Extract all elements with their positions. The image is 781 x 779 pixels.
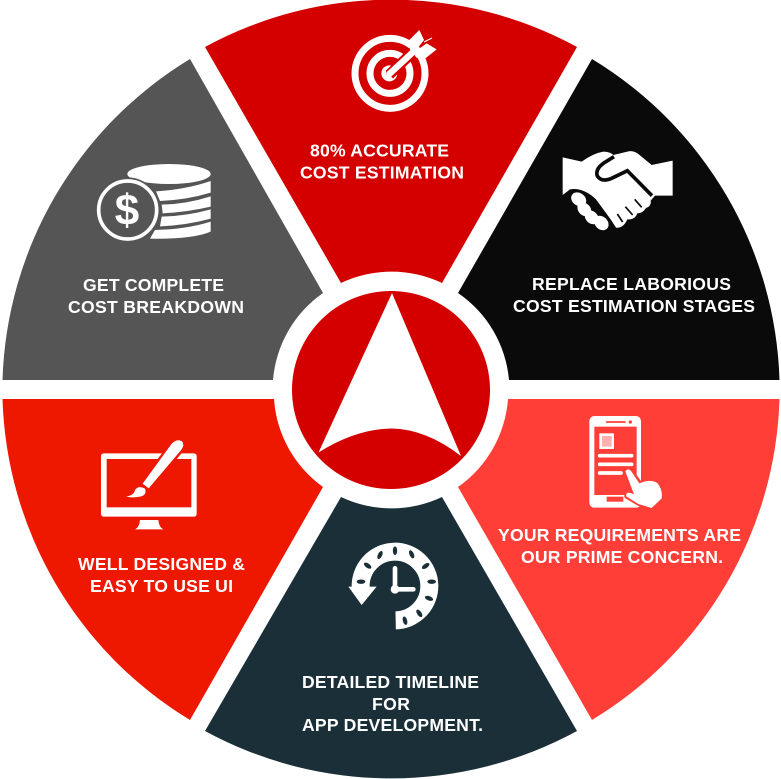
icon: monitor and paintbrush (101, 440, 197, 529)
panel: well designed ui (2, 399, 323, 720)
heading: your requirements: YOUR REQUIREMENTS ARE (498, 525, 741, 545)
icon: phone with tapping hand (589, 416, 663, 509)
wedge: grey (2, 59, 323, 380)
wedge: black (458, 59, 780, 380)
wedge: navy (205, 497, 577, 778)
heading: detailed timeline: APP DEVELOPMENT. (302, 715, 483, 735)
panel: detailed timeline (205, 497, 577, 778)
heading: accurate cost estimation (300, 140, 464, 182)
wedge: bright red (2, 399, 323, 720)
logo arrowhead (318, 293, 461, 456)
heading: your requirements (498, 525, 741, 567)
heading: your requirements: OUR PRIME CONCERN. (521, 547, 723, 567)
panel: your requirements (458, 399, 780, 720)
icon: coins and dollar (95, 164, 211, 243)
icon: clock with arrow (348, 546, 436, 625)
wedge: coral (458, 399, 780, 720)
heading: cost breakdown: COST BREAKDOWN (68, 297, 244, 317)
panel: cost breakdown (2, 59, 323, 380)
heading: detailed timeline: DETAILED TIMELINE (302, 672, 479, 692)
heading: accurate cost estimation: 80% ACCURATE (310, 140, 449, 160)
panel: replace laborious stages (458, 59, 780, 380)
heading: well designed ui: EASY TO USE UI (90, 576, 233, 596)
heading: detailed timeline (302, 672, 483, 735)
icon: target with arrow (355, 30, 437, 108)
heading: cost breakdown (68, 275, 244, 317)
heading: replace laborious stages: COST ESTIMATION STAGES (513, 296, 755, 316)
heading: accurate cost estimation: COST ESTIMATION (300, 162, 464, 182)
heading: replace laborious stages (513, 274, 755, 316)
icon: coins and dollar: $ (115, 186, 139, 235)
heading: well designed ui: WELL DESIGNED & (78, 554, 245, 574)
heading: detailed timeline: FOR (372, 694, 410, 714)
wedge: top red (205, 0, 577, 283)
heading: well designed ui (78, 554, 245, 596)
heading: replace laborious stages: REPLACE LABORIOUS (532, 274, 731, 294)
center logo (292, 291, 490, 489)
logo disc (292, 291, 490, 489)
icon: handshake (563, 151, 673, 233)
heading: cost breakdown: GET COMPLETE (83, 275, 224, 295)
panel: accurate cost estimation (205, 0, 577, 283)
